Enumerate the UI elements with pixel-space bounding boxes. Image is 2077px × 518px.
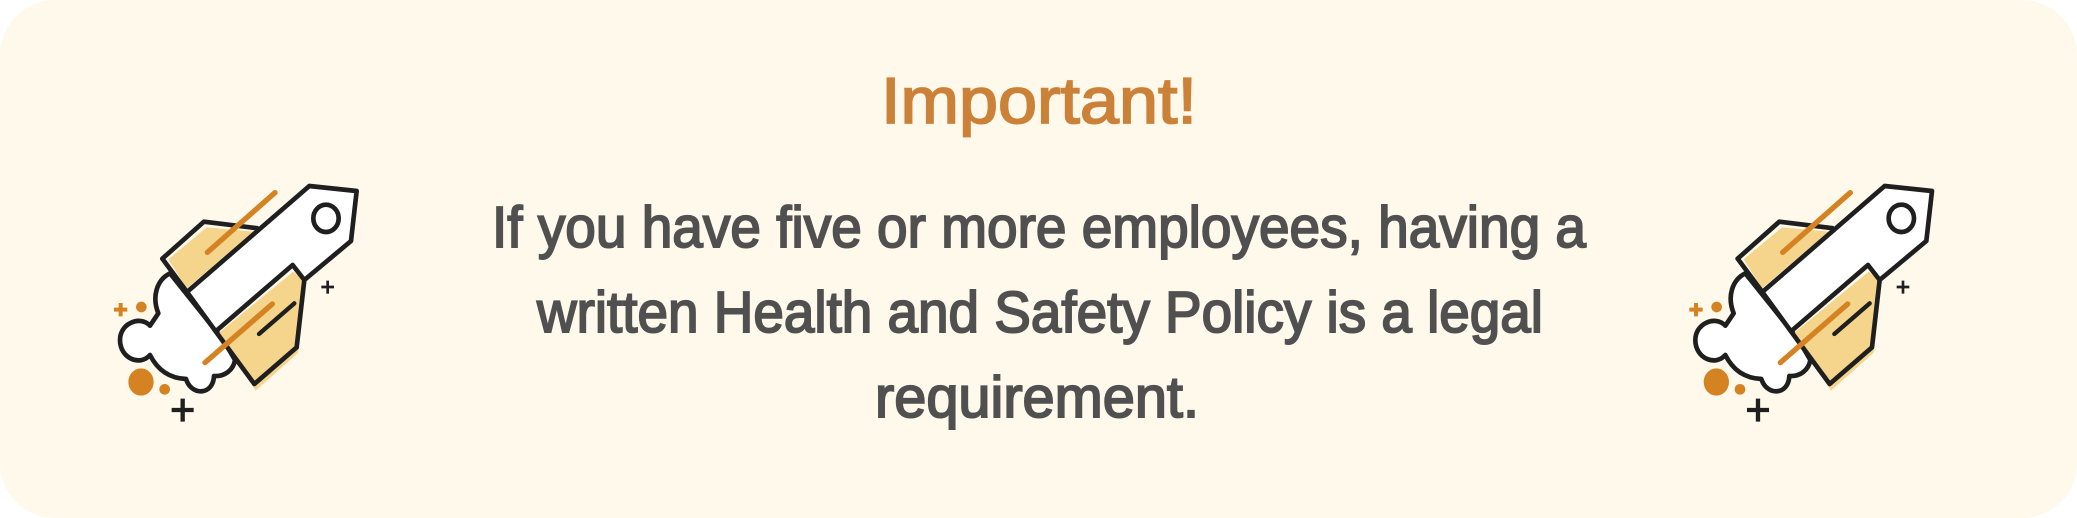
- text block: policy statement: written Health and Safety Policy is a legal: [536, 280, 1543, 345]
- title: Important!: [881, 64, 1197, 137]
- text block: policy statement: If you have five or more employees, having a: [492, 195, 1587, 260]
- text block: policy statement: [492, 195, 1587, 430]
- icon: left rocket: [114, 186, 357, 422]
- text block: policy statement: requirement.: [875, 365, 1199, 430]
- icon: right rocket: [1689, 186, 1932, 422]
